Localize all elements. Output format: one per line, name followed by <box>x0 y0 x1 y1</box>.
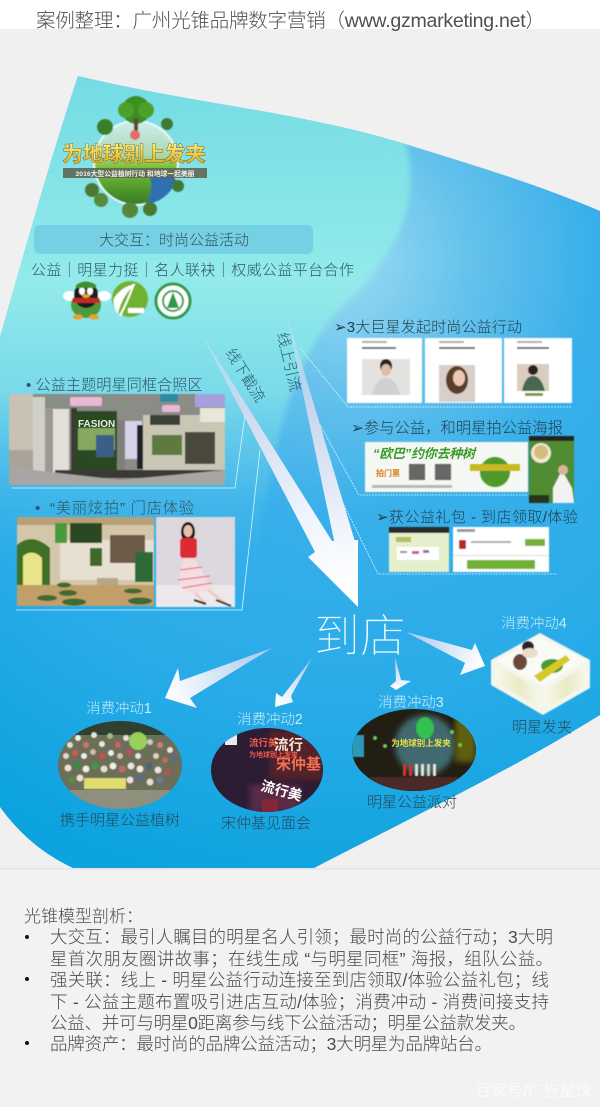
arrow: to impulse 2 <box>275 658 312 707</box>
text: partner keywords: 公益｜明星力挺｜名人联袂｜权威公益平台合作 <box>31 262 354 279</box>
photo: tree planting crowd <box>58 721 182 809</box>
arrow: online flow to store <box>285 308 358 590</box>
heading: three stars: ➢3大巨星发起时尚公益行动 <box>334 319 522 336</box>
photo: fan meeting LED signs: 流行美 <box>259 777 304 804</box>
watermark: 百家号/广告星球 <box>475 1082 591 1100</box>
poster: phone screen <box>529 436 574 503</box>
icon: forestry circle logo <box>155 283 191 319</box>
heading: store experience: • <box>35 500 40 517</box>
caption: impulse 4: 明星发夹 <box>512 719 572 736</box>
label: impulse 1: 消费冲动1 <box>86 700 152 717</box>
poster: oppa invites you: 拍门票 <box>376 468 400 478</box>
photo: fan meeting LED signs: 流行 <box>274 736 303 754</box>
photo: fan meeting LED signs: 宋仲基 <box>276 755 321 773</box>
caption: impulse 2: 宋仲基见面会 <box>221 815 311 832</box>
photo: charity party stage: 为地球别上发夹 <box>391 738 451 748</box>
poster: oppa invites you: “欧巴”约你去种树 <box>373 446 477 461</box>
bullet 2: 强关联：线上 - 明星公益行动连接至到店领取/体验公益礼包；线 <box>50 967 549 992</box>
arrow: to impulse 4 <box>406 632 485 675</box>
poster: oppa invites you <box>365 442 528 492</box>
icon: EE leaf logo <box>112 281 148 317</box>
logo headline: 为地球别上发夹 <box>62 143 206 166</box>
heading: to store: 到店 <box>314 610 406 662</box>
poster text: FASION: FASION <box>78 419 115 430</box>
label: offline flow: 线下截流 <box>222 346 268 406</box>
heading: store experience: “美丽炫拍” 门店体验 <box>50 500 194 517</box>
arrow: offline flow to store <box>198 328 358 607</box>
bullet 1: 星首次朋友圈讲故事；在线生成 “与明星同框” 海报，组队公益。 <box>50 946 553 971</box>
band: 大交互 heading: 大交互：时尚公益活动 <box>99 229 249 250</box>
caption: impulse 1: 携手明星公益植树 <box>60 812 180 829</box>
heading: gift pack: ➢获公益礼包 - 到店领取/体验 <box>376 509 578 526</box>
photo: woman in red top <box>156 517 235 607</box>
label: impulse 3: 消费冲动3 <box>378 694 444 711</box>
label: impulse 4: 消费冲动4 <box>501 615 567 632</box>
bullet 3: 品牌资产：最时尚的品牌公益活动；3大明星为品牌站台。 <box>50 1031 492 1056</box>
photo: fan meeting LED signs: 流行美 <box>249 737 278 749</box>
label: impulse 2: 消费冲动2 <box>237 711 303 728</box>
arrow: to impulse 3 <box>390 657 411 690</box>
bullet 1 <box>25 924 553 971</box>
logo sub-band <box>63 168 207 178</box>
icon: QQ penguin <box>63 282 111 320</box>
arrow: to impulse 1 <box>165 648 272 708</box>
panel: model analysis <box>24 902 553 1056</box>
bullet 2: 下 - 公益主题布置吸引进店互动/体验；消费冲动 - 消费间接支持 <box>50 989 549 1014</box>
band: 大交互 heading <box>34 225 313 254</box>
bullet 2 <box>25 967 549 1035</box>
caption: impulse 3: 明星公益派对 <box>367 794 457 811</box>
cards: WeChat moments <box>347 338 572 403</box>
heading: poster: ➢参与公益，和明星拍公益海报 <box>351 419 563 437</box>
bullet 1: 大交互：最引人瞩目的明星名人引领；最时尚的公益行动；3大明 <box>50 924 553 949</box>
photo: charity party stage <box>352 709 476 791</box>
screenshot: gift page 1 <box>389 527 449 572</box>
bullet 2: 公益、并可与明星0距离参与线下公益活动；明星公益款发夹。 <box>50 1010 526 1035</box>
title: 案例整理：广州光锥品牌数字营销（www.gzmarketing.net） <box>36 4 545 33</box>
photo: fan meeting LED signs: 为地球别上发夹 <box>249 750 298 759</box>
logo: earth campaign <box>62 96 207 218</box>
photo: store interior <box>17 517 154 606</box>
label: online flow: 线上引流 <box>273 331 303 393</box>
screenshot: gift page 2 <box>453 527 549 572</box>
logo sub-band: 2016大型公益植树行动 和地球一起美丽 <box>76 169 195 178</box>
panel: blue fan background <box>0 60 600 870</box>
analysis heading: 光锥模型剖析： <box>24 902 143 927</box>
photo: store front <box>9 394 225 485</box>
product: hair clip box <box>491 633 590 715</box>
photo: fan meeting LED signs <box>211 728 323 812</box>
heading: star photo area: • 公益主题明星同框合照区 <box>26 377 203 394</box>
